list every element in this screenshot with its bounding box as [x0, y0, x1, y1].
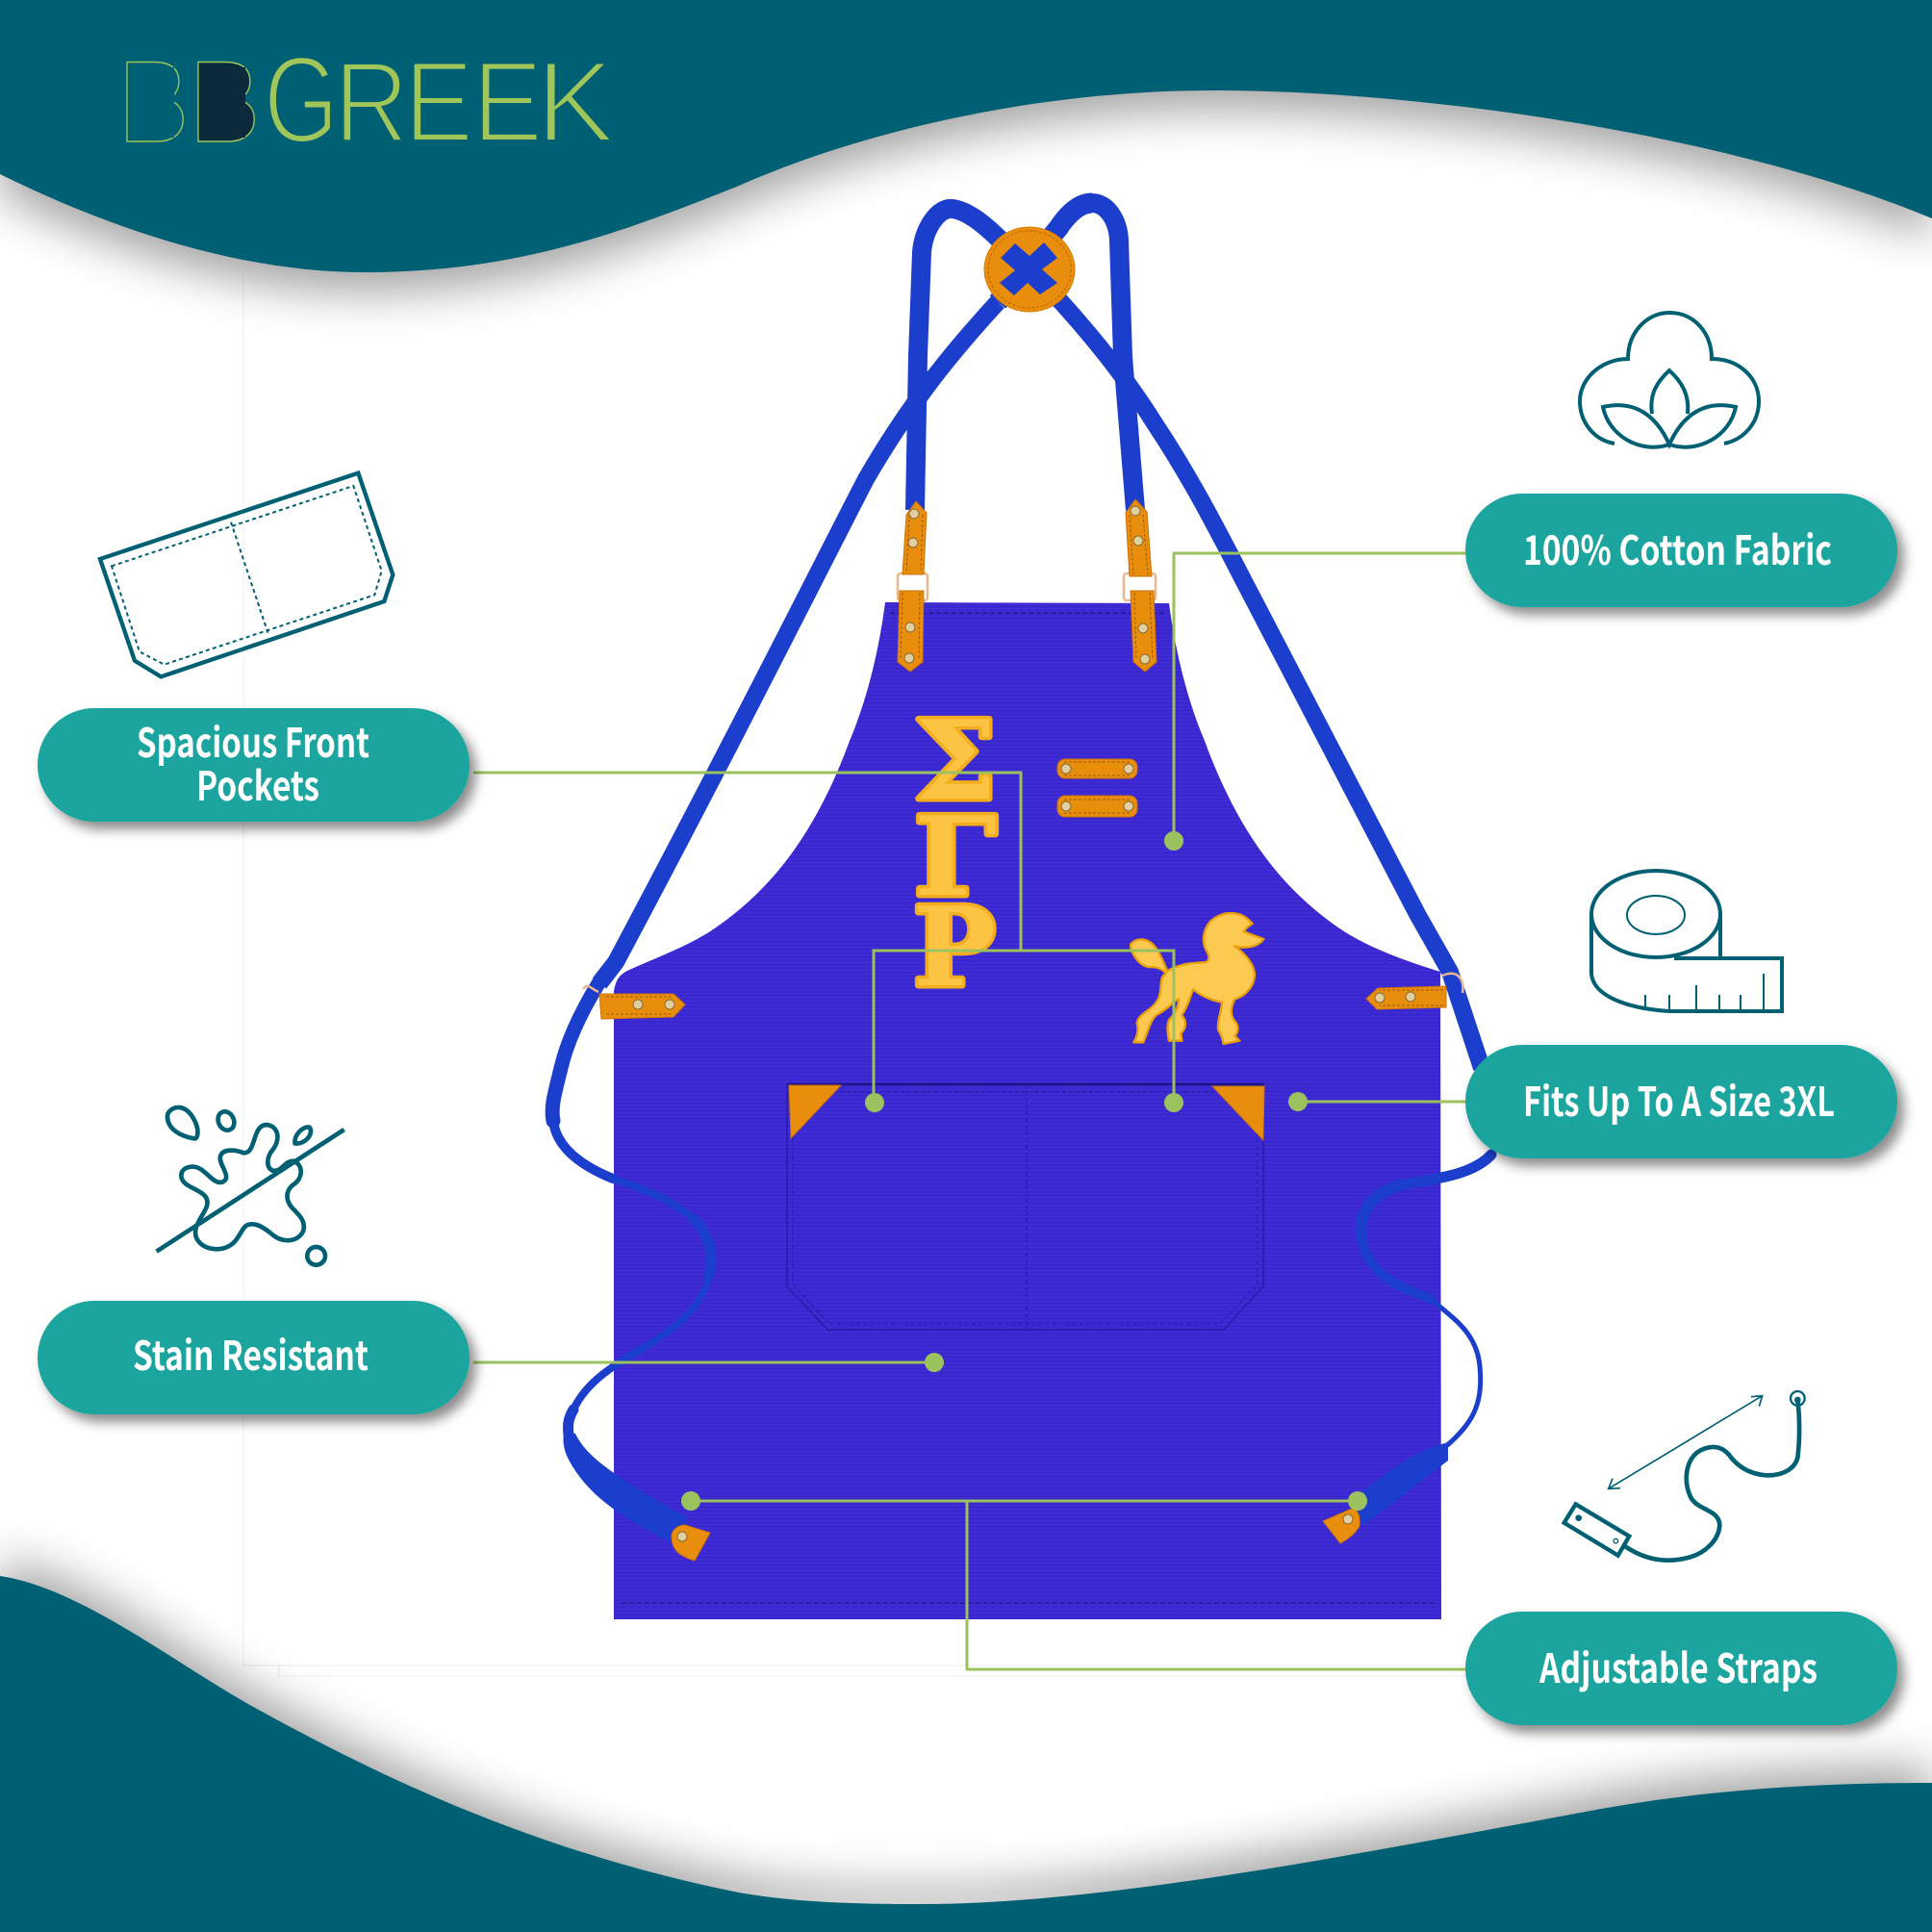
label: Fits Up To A Size 3XL: Fits Up To A Size 3XL [1523, 1070, 1835, 1129]
leather pocket corner right [1212, 1086, 1264, 1140]
bottom wave banner [0, 1561, 1932, 1932]
top wave banner [0, 0, 1932, 292]
apron body [614, 602, 1441, 1619]
stitched ring on patch [988, 231, 1071, 308]
connector: Stain Resistant [473, 1353, 944, 1372]
logo: BBGREEK: B [190, 38, 260, 166]
icon: adjustable strap [1564, 1391, 1805, 1561]
strap tabs [599, 499, 1446, 1561]
label: Spacious Front Pockets: Spacious Front [137, 711, 369, 770]
metal buckles [583, 573, 1462, 993]
apron upper straps [599, 203, 1482, 1068]
label: Adjustable Straps [1465, 1612, 1897, 1725]
label: Adjustable Straps: Adjustable Straps [1538, 1637, 1818, 1695]
icon: stain splat with slash [157, 1107, 344, 1265]
rivets [633, 506, 1415, 1541]
icon: measuring tape [1591, 871, 1782, 1011]
embroidered Greek letters: Σ [914, 697, 997, 825]
logo: BBGREEK: G [264, 32, 339, 169]
logo: BBGREEK: K [536, 38, 615, 166]
connector: 100% Cotton Fabric [1164, 553, 1465, 851]
connector: Spacious Front Pockets [473, 773, 1183, 1112]
label: Stain Resistant: Stain Resistant [133, 1324, 369, 1383]
embroidered Greek letters [913, 697, 997, 1011]
label: Stain Resistant [38, 1301, 470, 1414]
leather stitching [606, 515, 1443, 1014]
embroidered poodle [1131, 913, 1263, 1044]
logo: BBGREEK: E [472, 38, 543, 166]
round leather neck patch [984, 227, 1075, 312]
X strap through patch [1000, 242, 1057, 295]
leather pocket corner left [789, 1085, 841, 1138]
label: Fits Up To A Size 3XL [1465, 1045, 1897, 1158]
leather chest patch and strap tabs [583, 227, 1462, 1561]
embroidered Greek letters: Γ [914, 793, 997, 921]
icon: cotton boll [1580, 313, 1759, 447]
waist strap right [1352, 1155, 1491, 1525]
connector: Fits Up To A Size 3XL [1288, 1092, 1465, 1111]
logo: BBGREEK [118, 32, 615, 169]
front pocket [787, 1084, 1264, 1330]
embroidered Greek letters: Ρ [913, 883, 996, 1011]
logo: BBGREEK: R [334, 38, 409, 166]
label: Spacious Front Pockets [38, 708, 470, 822]
connector: Adjustable Straps [681, 1491, 1465, 1669]
logo: BBGREEK: E [404, 38, 473, 166]
logo: BBGREEK: B [118, 38, 189, 166]
label: Spacious Front Pockets: Pockets [196, 754, 319, 813]
icon: pocket [100, 473, 393, 676]
label: 100% Cotton Fabric: 100% Cotton Fabric [1523, 519, 1832, 577]
label: 100% Cotton Fabric [1465, 494, 1897, 607]
waist strap left [552, 983, 711, 1543]
